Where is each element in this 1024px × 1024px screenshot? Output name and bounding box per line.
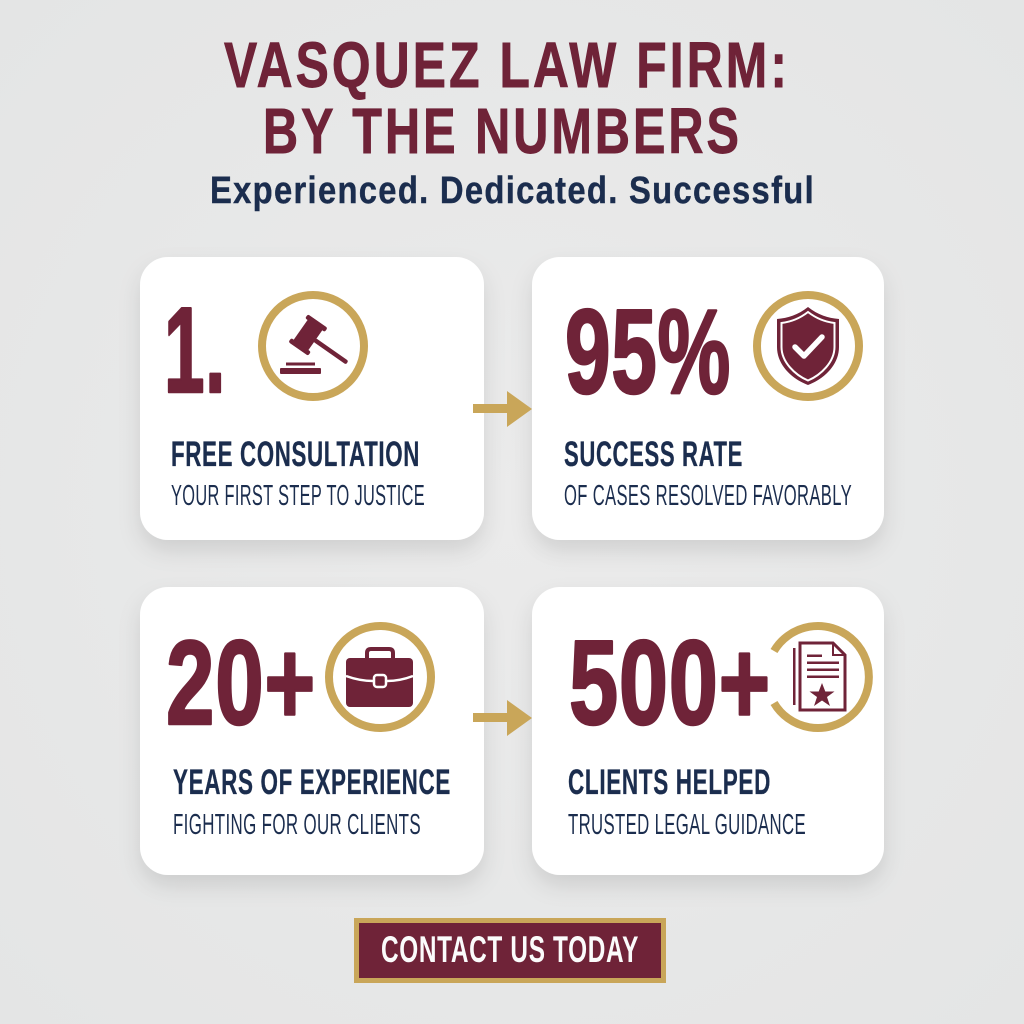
stat: 20+: 20+	[166, 616, 316, 750]
arrow: top row	[473, 391, 532, 427]
panel: clients helped	[532, 587, 884, 875]
subtitle: Experienced. Dedicated. Successful	[210, 170, 815, 212]
panel: success rate	[532, 257, 884, 540]
text: fighting for our clients: FIGHTING FOR OUR CLIENTS	[173, 809, 421, 841]
title	[224, 29, 790, 167]
icon: gavel	[262, 295, 364, 397]
text: trusted legal guidance: TRUSTED LEGAL GUIDANCE	[568, 809, 806, 841]
label: free consultation: FREE CONSULTATION	[171, 435, 420, 474]
label: clients helped: CLIENTS HELPED	[568, 763, 771, 802]
title: BY THE NUMBERS	[263, 95, 742, 167]
title: VASQUEZ LAW FIRM:	[224, 29, 790, 101]
label: success rate: SUCCESS RATE	[564, 435, 743, 474]
icon: shield with check	[757, 295, 859, 397]
icon: document with star	[774, 626, 869, 728]
panel: years of experience	[140, 587, 484, 875]
label: years of experience: YEARS OF EXPERIENCE	[173, 763, 451, 802]
arrow: bottom row	[473, 700, 532, 736]
button: contact us today	[356, 920, 664, 980]
panel: free consultation	[140, 257, 484, 540]
icon: briefcase	[329, 626, 431, 728]
stat: 95%: 95%	[565, 285, 731, 419]
button: contact us today: CONTACT US TODAY	[381, 929, 639, 970]
text: your first step to justice: YOUR FIRST STEP TO JUSTICE	[171, 480, 425, 512]
stat: 500+: 500+	[569, 616, 771, 750]
stat: 1.: 1.	[164, 282, 226, 418]
